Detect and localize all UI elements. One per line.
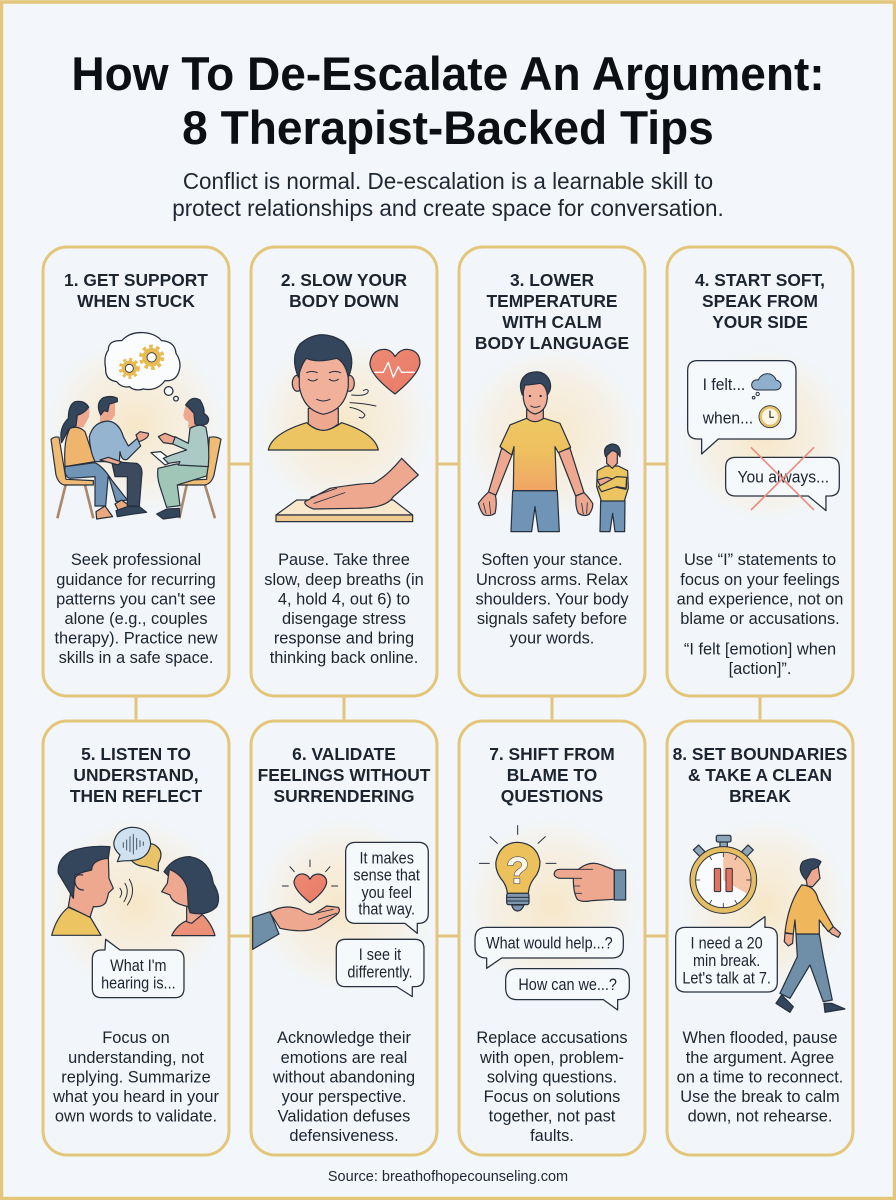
heading 7: 7. SHIFT FROM	[489, 744, 615, 764]
heading 5: THEN REFLECT	[70, 786, 202, 806]
therapist	[151, 398, 209, 519]
heading 6: FEELINGS WITHOUT	[258, 765, 431, 785]
speech bubble: It makes sense	[346, 842, 428, 933]
speech bubble: I felt when: when...	[702, 409, 753, 427]
body 7: with open, problem-	[479, 1049, 624, 1067]
body 3: signals safety before	[477, 610, 627, 628]
heading 1: 1. GET SUPPORT	[64, 270, 208, 290]
speech bubble: It makes sense: that way.	[358, 901, 415, 919]
panel 1: get support	[43, 247, 229, 696]
heading 6: SURRENDERING	[274, 786, 414, 806]
illustration: stopwatch and walking person	[676, 835, 845, 1012]
body 4: Use “I” statements to	[684, 551, 836, 569]
body 7: solving questions.	[487, 1068, 617, 1086]
heading 6: 6. VALIDATE	[292, 744, 396, 764]
body 4: “I felt [emotion] when	[684, 640, 836, 658]
speech bubble: I felt when	[688, 361, 796, 454]
body 6: your perspective.	[282, 1088, 406, 1106]
speech bubble: I see it differently: I see it	[359, 946, 402, 964]
heading 8: & TAKE A CLEAN	[688, 765, 832, 785]
heading 2: 2. SLOW YOUR	[281, 270, 407, 290]
body 2: 4, hold 4, out 6) to	[278, 590, 410, 608]
heading 5: 5. LISTEN TO	[81, 744, 191, 764]
panel 2: slow your body down	[251, 247, 437, 696]
body 2: slow, deep breaths (in	[264, 571, 424, 589]
card 5	[43, 721, 229, 1155]
illustration: open hand with heart and bubbles	[253, 842, 428, 997]
body 8: down, not rehearse.	[688, 1108, 832, 1126]
body 3: Soften your stance.	[481, 551, 623, 569]
adult with open arms	[478, 372, 593, 532]
speech bubble: I need a 20 min break	[676, 917, 777, 992]
heading 5: UNDERSTAND,	[73, 765, 199, 785]
speech bubble: It makes sense: sense that	[353, 867, 421, 885]
heading 4: 4. START SOFT,	[695, 270, 825, 290]
body 7: Replace accusations	[476, 1029, 628, 1047]
speech bubble: What I'm hearing is: What I'm	[110, 957, 167, 975]
hand on flat surface	[276, 458, 418, 522]
client man	[89, 396, 148, 517]
body 5: own words to validate.	[55, 1108, 217, 1126]
body 2: thinking back online.	[270, 649, 418, 667]
body 8: Use the break to calm	[680, 1088, 840, 1106]
body 1: therapy). Practice new	[54, 630, 218, 648]
illustration: two people talking	[52, 827, 219, 998]
card 2	[251, 247, 437, 696]
speech bubble: I see it differently	[336, 939, 424, 997]
heading 7: BLAME TO	[507, 765, 597, 785]
icon: cloud	[752, 374, 781, 390]
body 4: [action]”.	[729, 660, 791, 678]
speech bubble: I felt when: I felt...	[703, 376, 745, 394]
body 8: the argument. Agree	[686, 1049, 834, 1067]
thought cloud with gears	[105, 333, 180, 401]
illustration: couple and therapist with thought cloud	[51, 333, 221, 519]
illustration: question bulb and pointing hand	[475, 826, 629, 1010]
body 4: blame or accusations.	[680, 610, 840, 628]
icon: stopwatch	[690, 835, 757, 913]
heading 2: BODY DOWN	[289, 291, 399, 311]
body 6: Acknowledge their	[277, 1029, 412, 1047]
body 5: replying. Summarize	[61, 1068, 211, 1086]
heading 7: QUESTIONS	[501, 786, 603, 806]
client woman	[61, 401, 133, 519]
body 1: patterns you can't see	[56, 590, 216, 608]
illustration: open stance adult and crossed-arm child	[478, 372, 628, 532]
listening woman	[162, 857, 219, 936]
title: 8 Therapist-Backed Tips	[182, 101, 714, 154]
body 3: your words.	[510, 630, 594, 648]
icon: clock	[759, 406, 781, 428]
body 2: response and bring	[274, 630, 414, 648]
panel 3: calm body language	[459, 247, 645, 696]
speech bubble: What I'm hearing is	[92, 939, 184, 998]
speech bubble: How can we: How can we...?	[518, 976, 617, 994]
heading 3: TEMPERATURE	[487, 291, 618, 311]
subtitle: protect relationships and create space for conversation.	[172, 195, 724, 221]
body 2: disengage stress	[282, 610, 406, 628]
card 3	[459, 247, 645, 696]
body 1: guidance for recurring	[56, 571, 216, 589]
speech bubble: What would help	[475, 927, 623, 968]
speech bubble: What would help: What would help...?	[486, 934, 613, 953]
panel 4: start soft	[667, 247, 853, 696]
icon: light bulb with question mark: ?	[506, 849, 529, 892]
body 4: and experience, not on	[677, 590, 843, 608]
body 7: faults.	[530, 1127, 574, 1145]
walking person	[776, 859, 845, 1012]
heading 3: BODY LANGUAGE	[475, 333, 629, 353]
connector grid	[136, 464, 760, 936]
chairs	[51, 437, 221, 518]
body 8: on a time to reconnect.	[677, 1068, 843, 1086]
panel 7: shift from blame	[459, 721, 645, 1155]
heading 8: BREAK	[729, 786, 791, 806]
speech bubble: I need a 20 min break: Let's talk at 7.	[682, 969, 771, 988]
icon: heart with pulse	[370, 349, 420, 394]
body 2: Pause. Take three	[278, 551, 410, 569]
card 8	[667, 721, 853, 1155]
speech bubble: I see it differently: differently.	[347, 963, 413, 982]
body 1: skills in a safe space.	[59, 649, 213, 667]
source credit: Source: breathofhopecounseling.com	[328, 1169, 568, 1185]
heading 4: YOUR SIDE	[712, 312, 808, 332]
body 6: defensiveness.	[289, 1127, 399, 1145]
heading 8: 8. SET BOUNDARIES	[673, 744, 848, 764]
panel 5: listen to understand	[43, 721, 229, 1155]
body 3: shoulders. Your body	[475, 590, 629, 608]
body 7: Focus on solutions	[484, 1088, 620, 1106]
card 6	[251, 721, 437, 1155]
panel 8: set boundaries	[667, 721, 853, 1155]
title: How To De-Escalate An Argument:	[71, 47, 825, 100]
person breathing	[268, 335, 378, 450]
card 4	[667, 247, 853, 696]
heading 1: WHEN STUCK	[77, 291, 195, 311]
icon: speech bubbles	[114, 827, 161, 871]
child with crossed arms	[597, 444, 628, 532]
speech bubble: You always crossed out: You always...	[737, 468, 829, 487]
speech bubble: I need a 20 min break: I need a 20	[691, 934, 763, 953]
body 6: without abandoning	[272, 1068, 415, 1086]
body 1: alone (e.g., couples	[64, 610, 208, 628]
body 5: Focus on	[102, 1029, 170, 1047]
pointing hand	[554, 863, 626, 901]
speech bubble: It makes sense: you feel	[361, 884, 412, 902]
panel 6: validate feelings	[251, 721, 437, 1155]
speech bubble: It makes sense: It makes	[359, 849, 414, 868]
illustration: calm breathing and hand on surface	[268, 335, 420, 522]
open hand	[253, 906, 339, 949]
body 1: Seek professional	[71, 551, 201, 569]
speech bubble: How can we	[506, 969, 629, 1010]
card 7	[459, 721, 645, 1155]
body 4: focus on your feelings	[680, 571, 840, 589]
subtitle: Conflict is normal. De-escalation is a learnable skill to	[183, 168, 713, 194]
body 6: Validation defuses	[278, 1108, 410, 1126]
speech bubble: What I'm hearing is: hearing is...	[101, 975, 176, 993]
talking man	[52, 846, 133, 935]
card 1	[43, 247, 229, 696]
body 5: what you heard in your	[52, 1088, 219, 1106]
speech bubble: I need a 20 min break: min break.	[693, 952, 760, 970]
body 3: Uncross arms. Relax	[476, 571, 629, 589]
heading 3: WITH CALM	[502, 312, 602, 332]
body 8: When flooded, pause	[683, 1029, 837, 1047]
heading 3: 3. LOWER	[510, 270, 594, 290]
body 5: understanding, not	[68, 1049, 204, 1067]
heading 4: SPEAK FROM	[702, 291, 818, 311]
body 7: together, not past	[489, 1108, 616, 1126]
body 6: emotions are real	[281, 1049, 407, 1067]
icon: light bulb with question mark	[479, 826, 556, 911]
icon: heart with rays	[282, 860, 338, 903]
illustration: I-statement bubbles	[688, 361, 839, 511]
speech bubble: You always crossed out	[726, 447, 839, 511]
